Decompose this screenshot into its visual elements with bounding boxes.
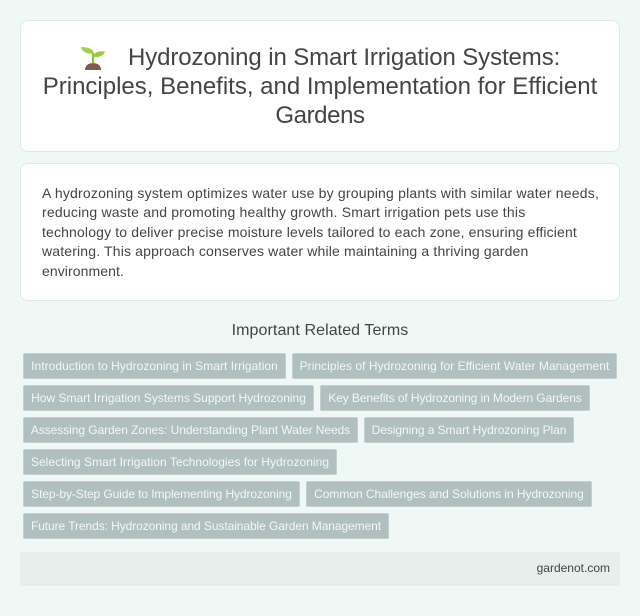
tag: Assessing Garden Zones: Understanding Plant Water Needs — [31, 423, 350, 437]
tag — [306, 481, 592, 507]
summary text: watering. This approach conserves water while maintaining a thriving garden — [42, 243, 528, 259]
title: Hydrozoning in Smart Irrigation Systems: — [128, 44, 560, 71]
tag: Future Trends: Hydrozoning and Sustainable Garden Management — [31, 519, 381, 533]
title: Principles, Benefits, and Implementation for Efficient — [43, 73, 597, 100]
tag — [364, 417, 574, 443]
tag: Common Challenges and Solutions in Hydrozoning — [314, 487, 584, 501]
related term tags — [23, 353, 617, 539]
panel: summary card — [20, 163, 620, 301]
summary text: technology to deliver precise moisture levels tailored to each zone, ensuring efficient — [42, 224, 577, 240]
title: Gardens — [275, 102, 365, 129]
tag: Key Benefits of Hydrozoning in Modern Gardens — [328, 391, 582, 405]
title — [43, 44, 598, 129]
tag: Step-by-Step Guide to Implementing Hydrozoning — [31, 487, 292, 501]
tag — [23, 481, 300, 507]
summary text: A hydrozoning system optimizes water use by grouping plants with similar water needs, — [42, 185, 599, 201]
tag: Designing a Smart Hydrozoning Plan — [372, 423, 566, 437]
tag: How Smart Irrigation Systems Support Hydrozoning — [31, 391, 306, 405]
tag: Introduction to Hydrozoning in Smart Irrigation — [31, 359, 278, 373]
summary text: environment. — [42, 263, 124, 279]
summary text: reducing waste and promoting healthy growth. Smart irrigation pets use this — [42, 204, 525, 220]
tag: Selecting Smart Irrigation Technologies for Hydrozoning — [31, 455, 329, 469]
tag — [292, 353, 617, 379]
heading: related terms: Important Related Terms — [232, 322, 408, 339]
tag — [320, 385, 590, 411]
tag — [23, 353, 286, 379]
tag: Principles of Hydrozoning for Efficient Water Management — [300, 359, 609, 373]
footer bar — [20, 552, 620, 586]
panel: title card — [20, 20, 620, 152]
footer source: gardenot.com — [537, 561, 610, 575]
tag — [23, 449, 337, 475]
summary text — [42, 185, 599, 279]
tag — [23, 513, 389, 539]
tag — [23, 417, 358, 443]
tag — [23, 385, 314, 411]
icon: seedling — [81, 47, 105, 70]
